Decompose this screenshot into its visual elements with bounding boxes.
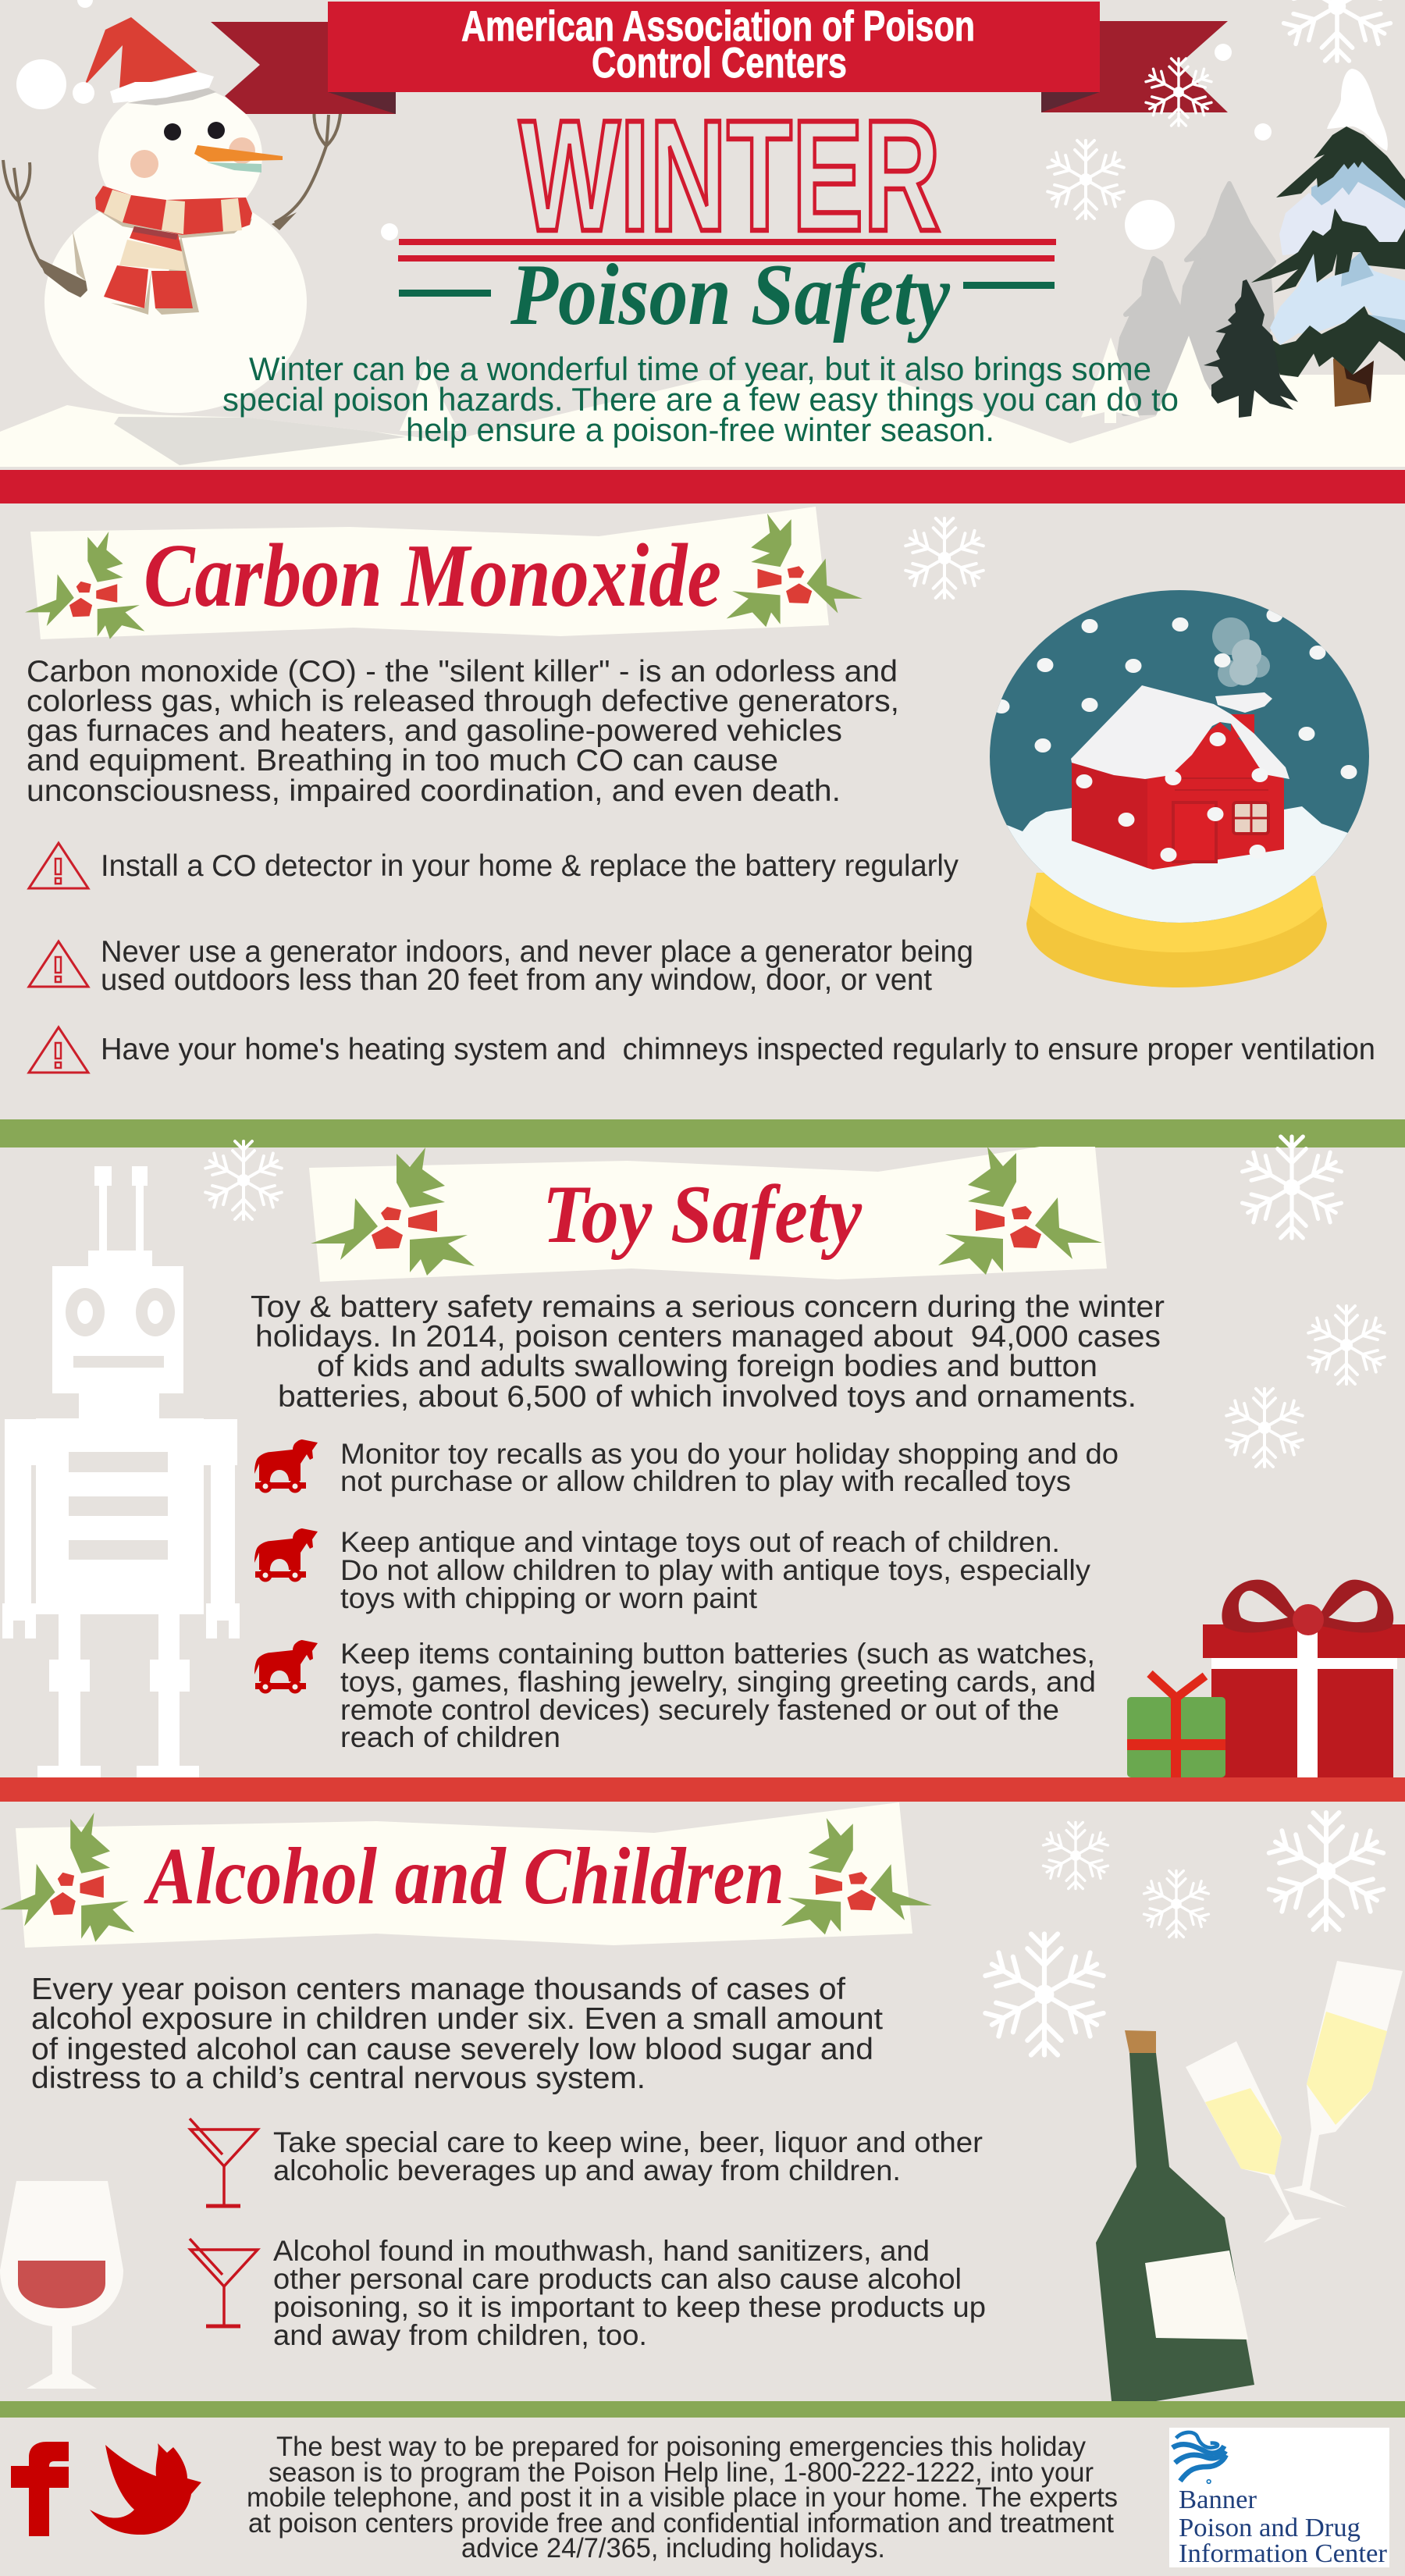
bullet: personal care products: Alcohol found in mouthwash, hand sanitizers, and	[273, 2235, 930, 2267]
bullet: personal care products: other personal care products can also cause alcohol	[273, 2263, 962, 2295]
bullet: toy recalls: Monitor toy recalls as you do your holiday shopping and do	[340, 1438, 1119, 1470]
intro paragraph	[251, 1290, 1165, 1414]
logo: Banner Poison and Drug Information Center	[1169, 2428, 1389, 2568]
smoke	[1212, 617, 1270, 687]
eyes	[164, 122, 225, 141]
bullet: generator: Never use a generator indoors, and never place a generator being	[101, 935, 973, 969]
intro paragraph: and equipment. Breathing in too much CO can cause	[27, 744, 778, 777]
intro paragraph: of kids and adults swallowing foreign bodies and button	[317, 1350, 1097, 1383]
intro paragraph: Carbon monoxide (CO) - the "silent killer" - is an odorless and	[27, 655, 898, 688]
bullet: antique toys	[254, 1526, 1091, 1614]
snow dots	[16, 0, 1272, 250]
intro paragraph	[27, 655, 899, 808]
top ribbon banner	[211, 2, 1228, 114]
icon: facebook	[11, 2442, 69, 2536]
intro paragraph: alcohol exposure in children under six. Even a small amount	[31, 2002, 883, 2036]
robot	[2, 1166, 240, 1777]
cheeks	[130, 137, 255, 178]
bullet: keep alcohol away: Take special care to keep wine, beer, liquor and other	[273, 2126, 983, 2158]
falling snow	[993, 608, 1357, 862]
heading banner: alcohol: Alcohol and Children	[144, 1831, 784, 1921]
green divider bar	[0, 1119, 1405, 1147]
header scene	[0, 0, 1405, 467]
closing paragraph: season is to program the Poison Help line, 1-800-222-1222, into your	[269, 2457, 1094, 2488]
closing paragraph: at poison centers provide free and confidential information and treatment	[248, 2508, 1114, 2539]
bullet: keep alcohol away: alcoholic beverages up and away from children.	[273, 2154, 901, 2186]
logo: Banner Poison and Drug Information Center: Banner	[1179, 2485, 1257, 2514]
intro paragraph: of ingested alcohol can cause severely low blood sugar and	[31, 2033, 873, 2066]
intro paragraph: holidays. In 2014, poison centers managed about 94,000 cases	[255, 1320, 1161, 1354]
bullet: keep alcohol away	[190, 2119, 983, 2206]
intro paragraph: unconsciousness, impaired coordination, and even death.	[27, 774, 841, 808]
intro paragraph: distress to a child’s central nervous system.	[31, 2062, 646, 2095]
bullet: toy recalls: not purchase or allow children to play with recalled toys	[340, 1465, 1071, 1497]
bullet: antique toys: Do not allow children to play with antique toys, especially	[340, 1554, 1091, 1586]
panel: alcohol and children	[0, 1802, 1403, 2401]
green divider bar 2	[0, 2401, 1405, 2418]
icon: twitter bird	[90, 2443, 201, 2535]
logo: Banner Poison and Drug Information Center: Information Center	[1179, 2539, 1388, 2568]
bullet: button batteries: remote control devices) securely fastened or out of the	[340, 1694, 1059, 1726]
carrot nose	[194, 145, 283, 162]
closing paragraph	[247, 2432, 1118, 2564]
heading banner: carbon monoxide: Carbon Monoxide	[144, 526, 721, 626]
scarf	[95, 186, 252, 315]
banner title: American Association of Poison	[461, 2, 975, 50]
closing paragraph: mobile telephone, and post it in a visible place in your home. The experts	[247, 2482, 1118, 2513]
bullet: CO detector: Install a CO detector in your home & replace the battery regularly	[101, 849, 959, 883]
banner title: Control Centers	[592, 38, 847, 87]
snow globe	[984, 590, 1374, 987]
snowman head	[98, 86, 262, 226]
red divider bar 2	[0, 1777, 1405, 1802]
house	[1071, 685, 1289, 870]
bullet: antique toys: toys with chipping or worn paint	[340, 1582, 758, 1614]
panel: carbon monoxide	[25, 507, 1375, 1073]
heading banner: toy safety: Toy Safety	[542, 1169, 863, 1260]
hat	[73, 17, 216, 105]
ribbon tails	[211, 21, 1228, 114]
heading banner: carbon monoxide	[25, 507, 863, 639]
intro paragraph: Every year poison centers manage thousands of cases of	[31, 1973, 845, 2006]
banner title	[461, 2, 975, 87]
bullet: personal care products: poisoning, so it is important to keep these products up	[273, 2291, 986, 2323]
closing paragraph: advice 24/7/365, including holidays.	[461, 2533, 885, 2564]
intro text	[222, 350, 1179, 448]
snowman	[3, 17, 341, 413]
bullet: button batteries: toys, games, flashing jewelry, singing greeting cards, and	[340, 1666, 1096, 1698]
snowflake	[905, 518, 984, 598]
snow mound	[1007, 806, 1348, 923]
snow hills	[0, 375, 1405, 467]
double red rule	[398, 239, 1056, 262]
bullet: personal care products	[190, 2235, 986, 2351]
snowflakes	[984, 1813, 1385, 2055]
snowman body	[44, 191, 307, 413]
intro paragraph: Toy & battery safety remains a serious concern during the winter	[251, 1290, 1165, 1324]
WINTER title: WINTER	[519, 87, 941, 265]
globe base	[1026, 873, 1327, 987]
globe glass	[990, 590, 1369, 923]
small snowy trees	[400, 336, 1225, 431]
bullet: CO detector	[29, 843, 959, 888]
bullet: button batteries	[254, 1638, 1096, 1753]
intro paragraph: gas furnaces and heaters, and gasoline-powered vehicles	[27, 714, 842, 748]
panel: toy safety	[2, 1137, 1405, 1777]
champagne flutes	[1186, 1961, 1403, 2243]
bullet: button batteries: Keep items containing button batteries (such as watches,	[340, 1638, 1095, 1670]
background grey trees	[1119, 183, 1274, 414]
intro text: special poison hazards. There are a few easy things you can do to	[222, 381, 1179, 418]
bullet: personal care products: and away from children, too.	[273, 2319, 647, 2351]
bullet: heating	[29, 1027, 1375, 1073]
big snowy pine tree	[1251, 69, 1405, 407]
snowflakes	[205, 1137, 1385, 1467]
small green gift	[1127, 1674, 1225, 1777]
bullet: heating: Have your home's heating system and chimneys inspected regularly to ensure proper ventilation	[101, 1033, 1375, 1066]
bullet: button batteries: reach of children	[340, 1721, 560, 1753]
red divider bar	[0, 470, 1405, 503]
large red gift	[1203, 1580, 1405, 1777]
intro text: Winter can be a wonderful time of year, but it also brings some	[249, 350, 1151, 387]
wine bottle	[1096, 2030, 1254, 2401]
bullet: generator	[29, 935, 973, 997]
arms	[3, 103, 341, 267]
bullet: generator: used outdoors less than 20 feet from any window, door, or vent	[101, 963, 932, 997]
bullet: antique toys: Keep antique and vintage toys out of reach of children.	[340, 1526, 1060, 1558]
intro paragraph: colorless gas, which is released through defective generators,	[27, 685, 899, 718]
Poison Safety heading: Poison Safety	[510, 247, 951, 343]
header snowflakes	[1047, 0, 1392, 219]
small dark pine tree	[1204, 279, 1298, 418]
heading banner: toy safety	[309, 1147, 1107, 1282]
intro text: help ensure a poison-free winter season.	[406, 411, 994, 448]
footer	[11, 2428, 1389, 2568]
intro paragraph	[31, 1973, 883, 2095]
wine glass	[0, 2181, 123, 2389]
logo: Banner Poison and Drug Information Center: Poison and Drug	[1179, 2514, 1361, 2542]
bullet: toy recalls	[254, 1438, 1119, 1497]
heading banner: alcohol	[0, 1802, 932, 1948]
closing paragraph: The best way to be prepared for poisoning emergencies this holiday	[276, 2432, 1086, 2462]
mouth	[207, 162, 261, 173]
intro paragraph: batteries, about 6,500 of which involved toys and ornaments.	[278, 1380, 1136, 1414]
